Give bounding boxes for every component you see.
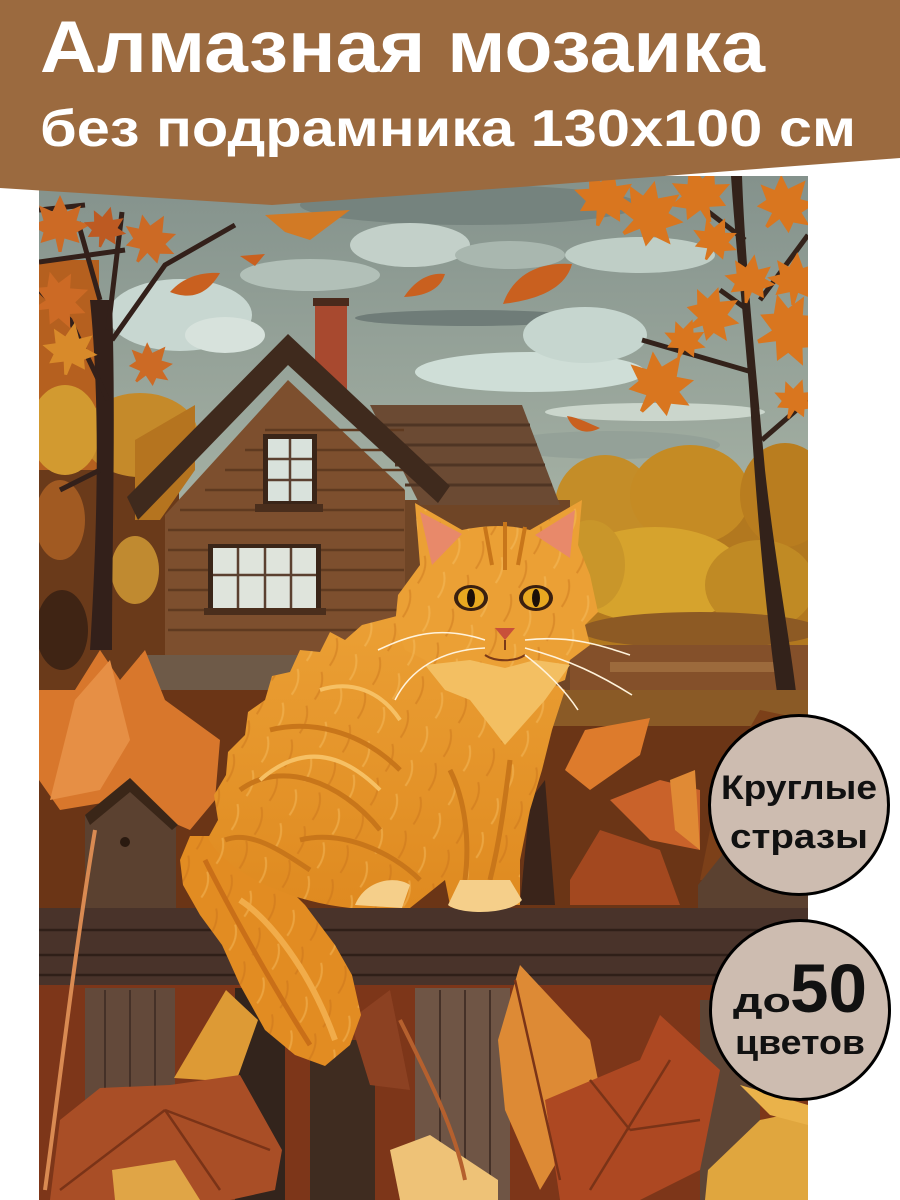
right maple tree <box>574 176 808 690</box>
fence pickets and lower leaves <box>39 830 808 1200</box>
header banner <box>0 0 900 205</box>
house <box>127 298 570 695</box>
badge: up to 50 colours <box>710 920 890 1100</box>
panel: painting of a ginger cat <box>24 154 839 1200</box>
badge: round rhinestones <box>710 716 888 894</box>
badge: round rhinestones: стразы <box>730 818 868 856</box>
badge: round rhinestones: Круглые <box>721 769 877 807</box>
heading: Алмазная мозаика: Алмазная мозаика <box>40 7 767 88</box>
badge: up to 50 colours: 50 <box>790 950 867 1027</box>
badge: up to 50 colours: цветов <box>735 1024 865 1062</box>
ginger cat <box>180 500 632 1066</box>
sky with clouds <box>39 176 808 516</box>
left background trees <box>24 195 235 690</box>
subheading: без подрамника 130х100 см: без подрамника 130х100 см <box>40 100 856 158</box>
falling leaves <box>170 210 600 432</box>
badge: up to 50 colours: до <box>733 982 791 1020</box>
distant autumn trees <box>556 443 808 690</box>
meadow and foreground foliage <box>39 650 808 912</box>
fence rail <box>39 908 808 990</box>
